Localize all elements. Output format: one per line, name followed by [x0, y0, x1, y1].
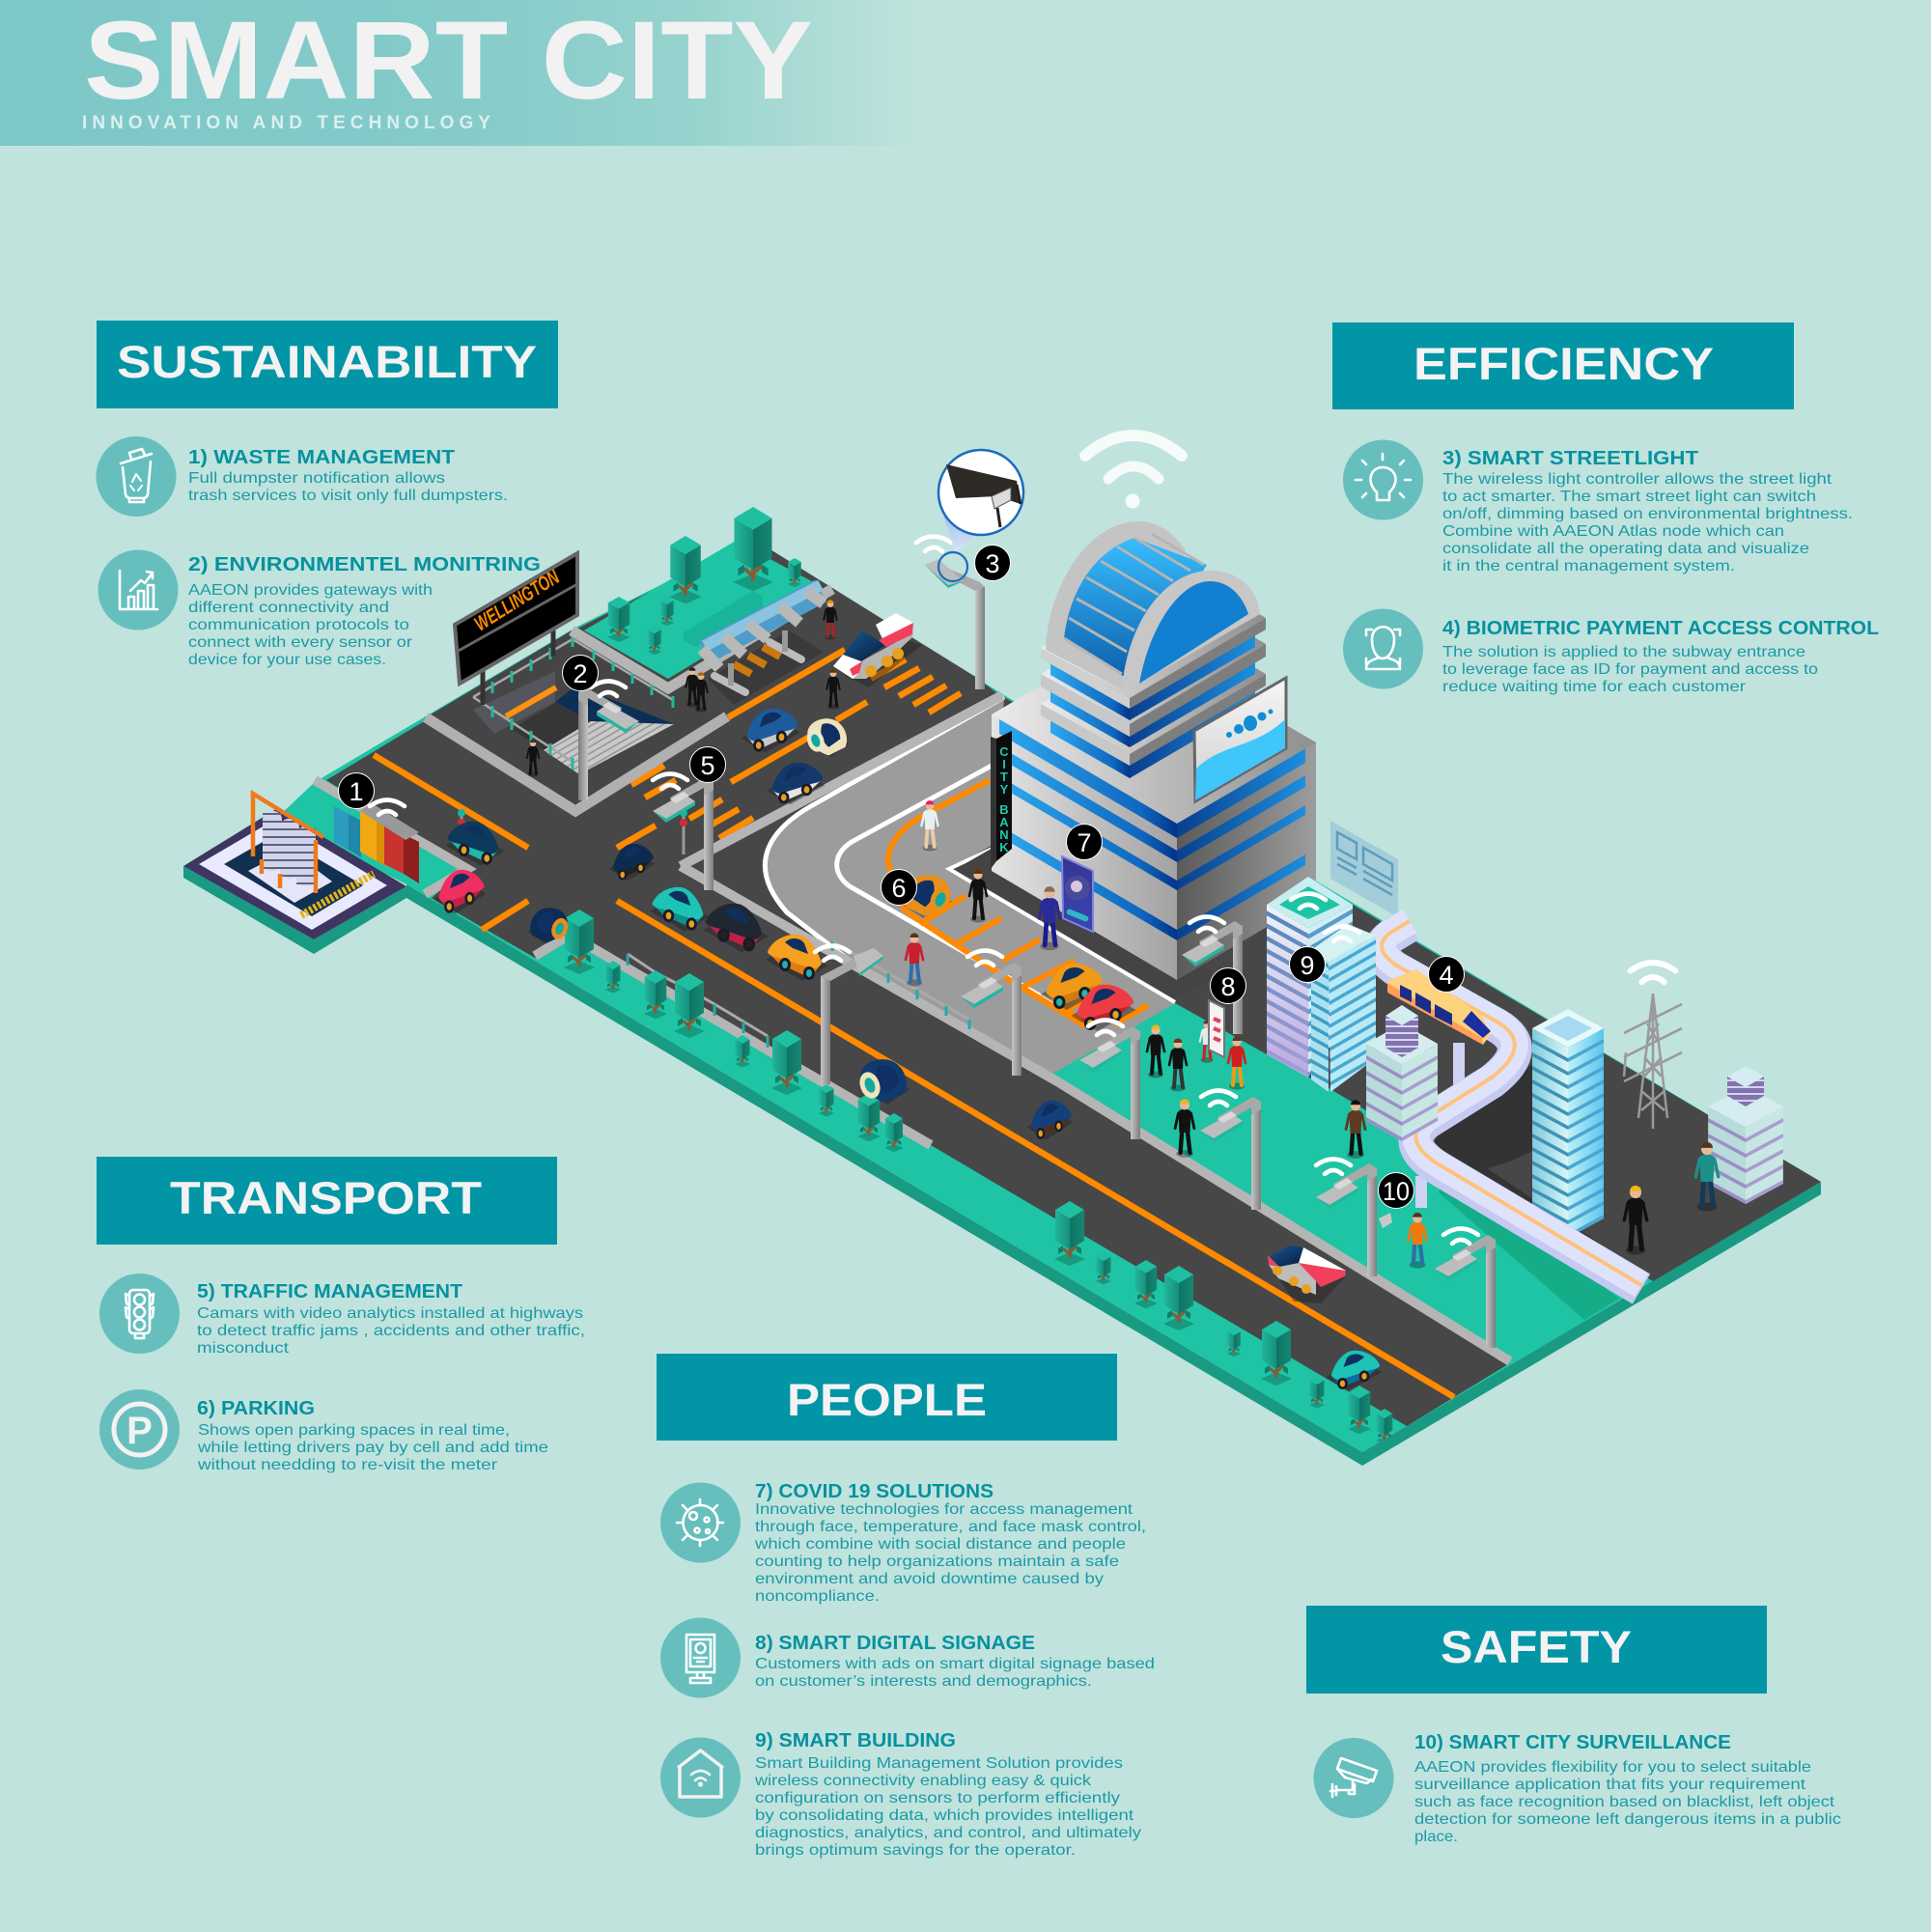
- icon: smart home: [660, 1738, 741, 1817]
- road markings: [374, 650, 1454, 1397]
- heading: 2) ENVIRONMENTEL MONITRING: [188, 554, 541, 575]
- description: while letting drivers pay by cell and add time: [197, 1440, 548, 1456]
- transmission pylon: [1624, 994, 1682, 1129]
- description: such as face recognition based on blacklist, left object: [1414, 1794, 1835, 1810]
- wifi signal: [1291, 894, 1326, 909]
- description: without needding to re-visit the meter: [197, 1457, 497, 1473]
- badge 2: 2: [573, 659, 588, 688]
- City Bank sign: N: [999, 827, 1009, 842]
- description: AAEON provides gateways with: [188, 582, 433, 599]
- tower A: [1366, 1005, 1438, 1141]
- tree: [819, 1084, 834, 1116]
- description: place.: [1414, 1829, 1458, 1845]
- digital signage kiosk: [1209, 1000, 1224, 1057]
- tree: [857, 1093, 881, 1141]
- description: [197, 1305, 585, 1357]
- man: [906, 933, 923, 987]
- hedge: [684, 591, 763, 647]
- description: connect with every sensor or: [188, 634, 412, 651]
- tree: [669, 536, 702, 603]
- lamp raised to right: [821, 948, 883, 1084]
- benches: [734, 647, 780, 674]
- lower roadside trees: [564, 910, 1393, 1444]
- man: [1624, 1186, 1647, 1255]
- road network: [326, 539, 1821, 1426]
- icon: chart: [98, 550, 178, 630]
- description: detection for someone left dangerous items in a public: [1414, 1811, 1841, 1828]
- street furniture fences: [628, 941, 969, 1048]
- heading: 5) TRAFFIC MANAGEMENT: [197, 1281, 462, 1302]
- tree: [733, 507, 773, 591]
- tree: [771, 1030, 802, 1095]
- billboard: Wellington: WELLINGTON: [470, 566, 564, 635]
- man: [1695, 1142, 1719, 1212]
- tree: [607, 597, 630, 642]
- description: [188, 582, 433, 668]
- tree: [1376, 1409, 1393, 1444]
- description: misconduct: [197, 1340, 290, 1357]
- City Bank sign: A: [999, 815, 1009, 829]
- description: different connectivity and: [188, 600, 389, 616]
- description: [754, 1755, 1141, 1859]
- description: on/off, dimming based on environmental brightness.: [1442, 506, 1853, 522]
- plaza with trees and bus stop: [572, 507, 832, 705]
- woman: [1169, 1038, 1187, 1091]
- man: [1039, 886, 1060, 950]
- badge 10: 10: [1383, 1177, 1410, 1206]
- subway entrance plot: [426, 630, 727, 811]
- vehicles: [434, 613, 1382, 1390]
- wifi signal: [1631, 963, 1675, 982]
- description: it in the central management system.: [1442, 558, 1735, 574]
- description: Full dumpster notification allows: [188, 470, 445, 487]
- City Bank sign: Y: [1000, 782, 1009, 797]
- badge 6: 6: [891, 874, 907, 903]
- car: [703, 904, 769, 952]
- tree: [1096, 1252, 1111, 1284]
- City Bank sign: I: [1002, 757, 1006, 771]
- description: Innovative technologies for access management: [755, 1501, 1133, 1518]
- wifi signal: [1325, 927, 1359, 941]
- description: Customers with ads on smart digital signage based: [755, 1656, 1155, 1672]
- badge 7: [1066, 825, 1103, 859]
- tree: [788, 558, 801, 587]
- tower nine rear: [1267, 877, 1353, 1078]
- badge 6: [881, 869, 917, 906]
- tree: [564, 910, 595, 974]
- car: [742, 709, 799, 753]
- lamp 3 raised: [925, 559, 985, 689]
- description: configuration on sensors to perform efficiently: [755, 1790, 1120, 1806]
- large wifi above bank: [1085, 435, 1182, 508]
- item 7 covid solutions: [660, 1481, 1146, 1605]
- tree: [1348, 1386, 1371, 1434]
- badge 1: 1: [349, 777, 364, 806]
- man: [1409, 1213, 1426, 1269]
- item 3 smart streetlight: [1343, 440, 1853, 574]
- description: to detect traffic jams , accidents and other traffic,: [197, 1323, 585, 1339]
- tree: [1134, 1260, 1158, 1308]
- description: to act smarter. The smart street light can switch: [1442, 489, 1816, 505]
- icon: parking: [99, 1389, 180, 1470]
- description: diagnostics, analytics, and control, and ultimately: [755, 1825, 1141, 1841]
- description: surveillance application that fits your requirement: [1414, 1777, 1806, 1793]
- traffic lights: [458, 809, 687, 854]
- man: [1346, 1100, 1365, 1159]
- icon: recycle bin: [97, 436, 176, 517]
- lamp: [653, 777, 714, 890]
- car: [766, 935, 827, 981]
- biometric kiosk screen: [1062, 856, 1093, 932]
- isometric city illustration: [183, 435, 1821, 1466]
- description: device for your use cases.: [188, 652, 386, 668]
- car: [1326, 1351, 1382, 1390]
- item 4 biometric payment: [1343, 608, 1879, 695]
- badge 3: 3: [985, 549, 1000, 578]
- badge 4: [1429, 956, 1464, 993]
- icon: face scan: [1343, 608, 1423, 689]
- heading band: [1332, 322, 1794, 409]
- heading band: EFFICIENCY: [1413, 338, 1714, 389]
- lamp: [1182, 921, 1243, 1034]
- badge 9: 9: [1300, 951, 1315, 980]
- badge 5: 5: [700, 751, 715, 780]
- description: The wireless light controller allows the street light: [1442, 471, 1833, 488]
- person: [826, 669, 840, 710]
- description: noncompliance.: [755, 1588, 880, 1605]
- curbs: [315, 695, 1510, 1361]
- description: Smart Building Management Solution provides: [755, 1755, 1123, 1772]
- heading band: [97, 1157, 557, 1245]
- child: [1200, 1021, 1214, 1063]
- heading: 8) SMART DIGITAL SIGNAGE: [755, 1633, 1035, 1654]
- heading band: SUSTAINABILITY: [117, 336, 537, 387]
- item 9 smart building: [660, 1730, 1141, 1859]
- description: Combine with AAEON Atlas node which can: [1442, 523, 1784, 540]
- badge 5: [689, 747, 726, 782]
- item 8 smart digital signage: [660, 1618, 1155, 1697]
- parking lot: [765, 697, 1217, 1076]
- pod: [527, 908, 571, 944]
- number badges: [338, 545, 1464, 1209]
- tower B: [1532, 1009, 1604, 1238]
- description: Shows open parking spaces in real time,: [198, 1422, 510, 1439]
- badge 8: 8: [1220, 972, 1236, 1001]
- City Bank sign: [991, 731, 1012, 869]
- description: reduce waiting time for each customer: [1442, 679, 1746, 695]
- lamp: [1435, 1235, 1496, 1348]
- heading: 10) SMART CITY SURVEILLANCE: [1414, 1732, 1731, 1753]
- icon: virus: [660, 1483, 741, 1562]
- heading band: SAFETY: [1441, 1621, 1632, 1672]
- bank building: [991, 521, 1316, 980]
- icon: signage: [660, 1618, 741, 1697]
- tower C: [1708, 1066, 1783, 1204]
- person: [686, 667, 699, 708]
- description: communication protocols to: [188, 617, 409, 633]
- wifi signals on equipment: [370, 537, 1478, 1244]
- description: Camars with video analytics installed at highways: [197, 1305, 583, 1322]
- description: by consolidating data, which provides intelligent: [755, 1807, 1134, 1824]
- waste treatment platform: [183, 794, 406, 954]
- panel: people: [657, 1354, 1155, 1859]
- man: [1175, 1099, 1194, 1158]
- upper tiers: [1041, 566, 1266, 778]
- tree: [674, 973, 705, 1038]
- car: [434, 870, 487, 914]
- tree: [660, 597, 674, 626]
- City Bank sign: K: [999, 840, 1009, 854]
- heading band: [1306, 1606, 1767, 1694]
- panel: safety: [1306, 1606, 1841, 1845]
- car: [767, 763, 825, 804]
- description: The solution is applied to the subway entrance: [1442, 644, 1805, 660]
- futuristic bus: [1268, 1246, 1346, 1303]
- streetlight controller zoom callout: [938, 450, 1023, 581]
- badge 1: [338, 772, 375, 809]
- icon: light bulb: [1343, 440, 1423, 519]
- lamp: [961, 963, 1021, 1076]
- lamp: [578, 687, 639, 800]
- description: [188, 470, 508, 504]
- description: [197, 1422, 548, 1473]
- description: counting to help organizations maintain a safe: [755, 1554, 1119, 1570]
- tree: [884, 1113, 904, 1152]
- badge 9: [1290, 946, 1325, 983]
- car: [651, 887, 709, 932]
- item 1 waste management: [97, 436, 508, 517]
- tree: [648, 626, 661, 655]
- pod: [856, 1059, 910, 1105]
- badge 7: 7: [1077, 828, 1092, 857]
- tree: [1054, 1201, 1085, 1266]
- base platform: [276, 539, 1821, 1466]
- badge 8: [1211, 967, 1245, 1004]
- City Bank sign: T: [1000, 770, 1008, 784]
- description: to leverage face as ID for payment and access to: [1442, 661, 1818, 678]
- dashboard panel: [1330, 821, 1398, 917]
- tower nine front: [1311, 924, 1376, 1092]
- waste bins: [334, 803, 419, 883]
- person: [824, 600, 837, 640]
- description: on customer’s interests and demographics.: [755, 1673, 1092, 1690]
- car: [608, 844, 655, 881]
- heading band: [657, 1354, 1117, 1441]
- badge 3: [975, 545, 1010, 581]
- icon: traffic light: [99, 1274, 180, 1354]
- description: [1442, 644, 1818, 695]
- tree: [605, 961, 621, 993]
- title: SMART CITY: [84, 0, 813, 123]
- monorail train: [1387, 969, 1491, 1045]
- storage tanks: [263, 811, 316, 886]
- icon: parking: P: [126, 1410, 153, 1452]
- description: [1442, 471, 1853, 574]
- description: wireless connectivity enabling easy & quick: [754, 1773, 1091, 1789]
- tree: [1309, 1376, 1325, 1408]
- street lamps: [578, 559, 1496, 1348]
- item 5 traffic management: [99, 1274, 585, 1357]
- description: which combine with social distance and people: [754, 1536, 1126, 1553]
- pod: [900, 875, 954, 918]
- title banner: [0, 0, 922, 146]
- description: AAEON provides flexibility for you to select suitable: [1414, 1759, 1811, 1776]
- panel: efficiency: [1332, 322, 1879, 695]
- lamp: [1316, 1163, 1377, 1276]
- heading: 3) SMART STREETLIGHT: [1442, 448, 1698, 469]
- heading: 7) COVID 19 SOLUTIONS: [755, 1481, 993, 1502]
- tree: [1163, 1266, 1194, 1330]
- woman: [1147, 1024, 1164, 1078]
- subtitle: INNOVATION AND TECHNOLOGY: [82, 113, 490, 133]
- heading band: [97, 321, 558, 408]
- man: [969, 869, 987, 923]
- pedestrians: [527, 600, 1719, 1269]
- City Bank sign: B: [999, 802, 1009, 817]
- description: through face, temperature, and face mask control,: [755, 1519, 1146, 1535]
- lamp: [1200, 1097, 1261, 1210]
- description: [754, 1501, 1146, 1605]
- badge 2: [562, 655, 599, 691]
- person: [527, 740, 539, 776]
- description: consolidate all the operating data and visualize: [1442, 541, 1809, 557]
- item 6 parking: [99, 1389, 548, 1473]
- monorail track: [1382, 921, 1641, 1289]
- City Bank sign: C: [999, 744, 1009, 759]
- surveillance camera: [1379, 1213, 1392, 1228]
- description: trash services to visit only full dumpsters.: [188, 488, 508, 504]
- glass tube roof: [705, 591, 821, 652]
- car: [446, 822, 504, 866]
- tree: [1227, 1328, 1241, 1357]
- badge 4: 4: [1439, 961, 1454, 990]
- panel: transport: [97, 1157, 585, 1473]
- billboard: Wellington: [455, 553, 577, 705]
- pod: [804, 718, 850, 757]
- description: brings optimum savings for the operator.: [755, 1842, 1076, 1859]
- heading band: PEOPLE: [787, 1374, 987, 1425]
- heading band: TRANSPORT: [170, 1172, 482, 1223]
- rooftop advertising screen: [1194, 678, 1286, 801]
- description: environment and avoid downtime caused by: [755, 1571, 1104, 1587]
- description: [1414, 1759, 1841, 1845]
- tree: [1261, 1321, 1292, 1386]
- heading: 1) WASTE MANAGEMENT: [188, 447, 455, 468]
- heading: 4) BIOMETRIC PAYMENT ACCESS CONTROL: [1442, 618, 1879, 639]
- woman: [921, 800, 938, 851]
- lamp: [1079, 1026, 1140, 1139]
- woman: [1228, 1036, 1245, 1089]
- tree: [735, 1035, 750, 1068]
- heading: 9) SMART BUILDING: [755, 1730, 956, 1751]
- item 2 environmental monitoring: [98, 550, 541, 668]
- tree: [644, 970, 667, 1019]
- panel: sustainability: [97, 321, 558, 668]
- car: [1040, 964, 1105, 1010]
- heading: 6) PARKING: [197, 1398, 315, 1419]
- car: [1027, 1101, 1074, 1140]
- smart building towers: [1267, 821, 1783, 1289]
- description: [755, 1656, 1155, 1690]
- futuristic bus: [833, 613, 922, 687]
- car: [1071, 985, 1135, 1031]
- item 10 smart city surveillance: [1313, 1732, 1841, 1845]
- badge 10: [1379, 1172, 1413, 1209]
- person: [694, 672, 708, 713]
- glass dome: [1046, 521, 1260, 690]
- icon: CCTV camera: [1313, 1738, 1394, 1818]
- shelter supports: [714, 642, 801, 692]
